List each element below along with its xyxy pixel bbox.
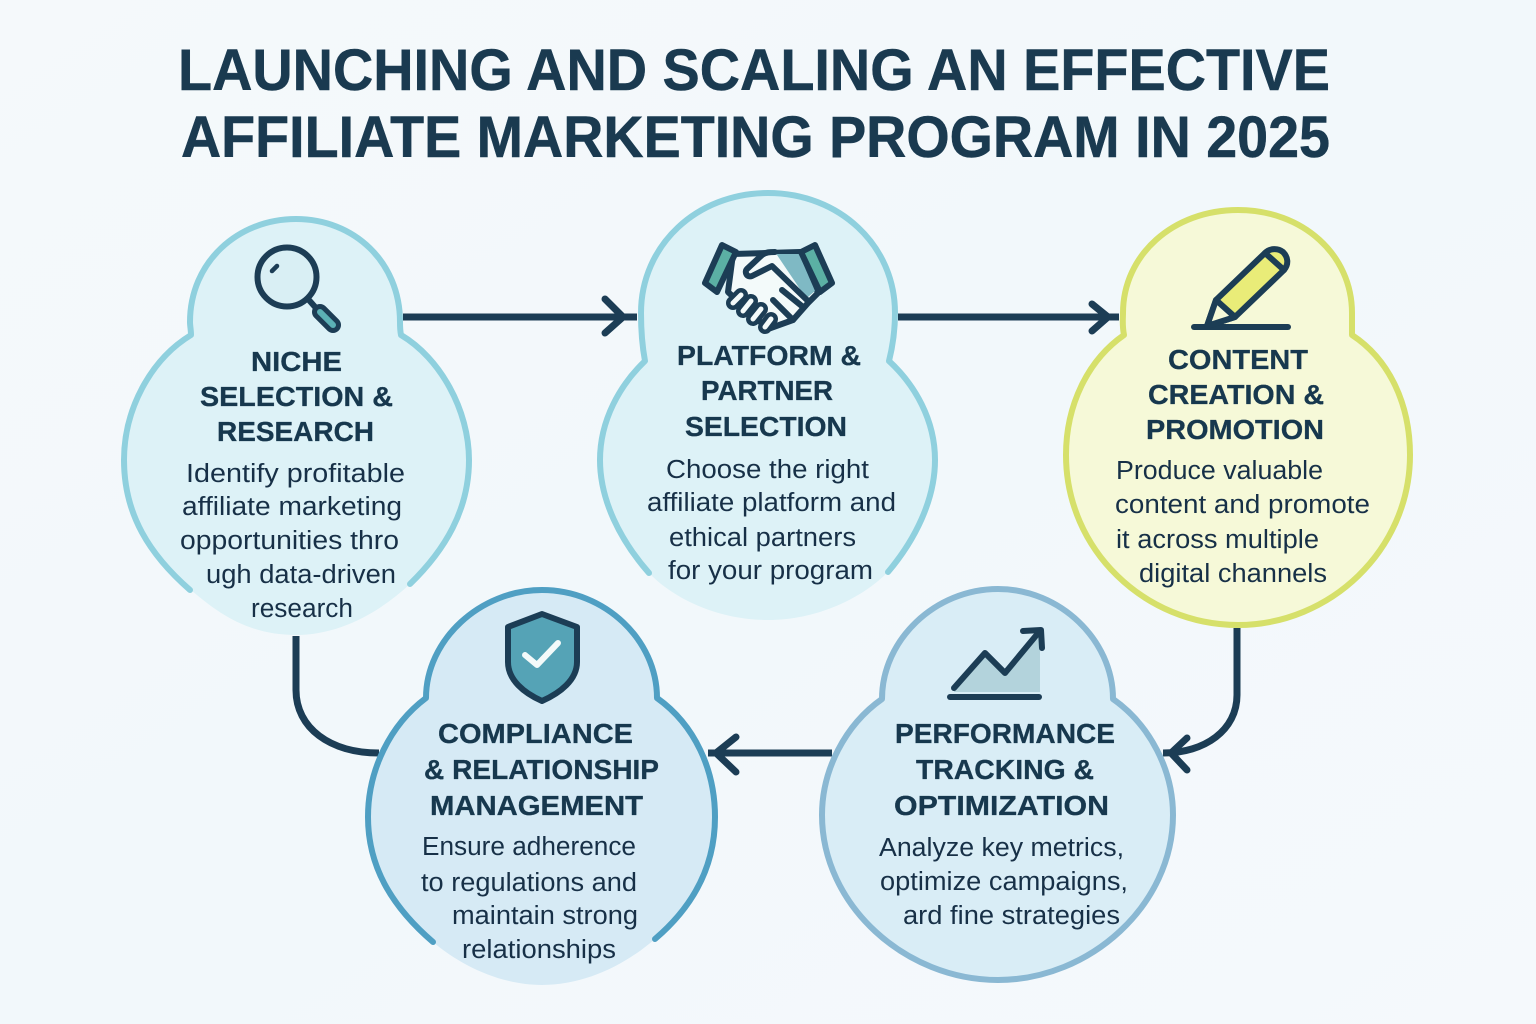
heading: content creation and promotion: CONTENT (1168, 344, 1308, 375)
heading: content creation and promotion: PROMOTION (1146, 414, 1324, 445)
text: compliance description: relationships (462, 936, 616, 964)
text: compliance description: to regulations and (421, 869, 637, 897)
text: platform description: affiliate platform and (647, 489, 896, 517)
arrow: performance to compliance (708, 737, 832, 772)
text: performance description (879, 834, 1128, 930)
text: content description: Produce valuable (1116, 457, 1323, 485)
text: compliance description (421, 833, 638, 964)
heading: content creation and promotion: CREATION & (1148, 379, 1324, 410)
title (178, 38, 1330, 170)
heading: compliance and relationship management: COMPLIANCE (438, 718, 633, 749)
arrow: platform to content (898, 304, 1119, 331)
heading: platform and partner selection (677, 340, 861, 442)
text: platform description: ethical partners (669, 524, 856, 552)
icon: pencil (1194, 249, 1288, 327)
panel: performance tracking and optimization (822, 589, 1173, 980)
heading: performance tracking and optimization (894, 718, 1115, 821)
heading: performance tracking and optimization: PERFORMANCE (895, 718, 1115, 749)
text: performance description: optimize campaigns, (880, 868, 1128, 896)
heading: niche selection and research (200, 346, 393, 447)
icon: growth chart (950, 630, 1042, 697)
heading: platform and partner selection: PLATFORM & (677, 340, 861, 371)
heading: compliance and relationship management (424, 718, 659, 821)
heading: content creation and promotion (1146, 344, 1324, 445)
panel: niche selection and research (124, 219, 469, 635)
heading: platform and partner selection: SELECTION (685, 411, 847, 442)
text: content description: it across multiple (1116, 526, 1319, 554)
panel: content creation and promotion (1066, 210, 1410, 625)
heading: compliance and relationship management: MANAGEMENT (430, 790, 643, 821)
text: platform description: for your program (668, 557, 873, 585)
heading: performance tracking and optimization: OPTIMIZATION (894, 790, 1109, 821)
text: platform description: Choose the right (666, 456, 869, 484)
text: content description: digital channels (1139, 560, 1327, 588)
heading: performance tracking and optimization: TRACKING & (916, 754, 1094, 785)
icon: handshake (705, 245, 832, 329)
arrow: niche to platform (403, 299, 637, 333)
heading: niche selection and research: SELECTION & (200, 381, 393, 412)
text: performance description: Analyze key metrics, (879, 834, 1124, 862)
text: niche description: ugh data-driven (206, 561, 396, 589)
icon: shield with check (508, 614, 577, 701)
title: LAUNCHING AND SCALING AN EFFECTIVE (178, 38, 1330, 103)
text: niche description: Identify profitable (186, 460, 405, 488)
panel: platform and partner selection (600, 193, 935, 620)
text: performance description: ard fine strategies (903, 902, 1120, 930)
text: niche description: affiliate marketing (182, 493, 402, 521)
icon: magnifying glass (258, 248, 333, 325)
title: AFFILIATE MARKETING PROGRAM IN 2025 (181, 105, 1330, 170)
text: niche description (180, 460, 405, 623)
heading: platform and partner selection: PARTNER (701, 375, 833, 406)
panel: compliance and relationship management (368, 590, 715, 985)
heading: niche selection and research: RESEARCH (217, 416, 374, 447)
text: niche description: opportunities thro (180, 527, 399, 555)
text: compliance description: Ensure adherence (422, 833, 636, 861)
text: content description: content and promote (1115, 491, 1370, 519)
text: platform description (647, 456, 896, 585)
arrow: niche to compliance (296, 636, 379, 753)
heading: niche selection and research: NICHE (251, 346, 342, 377)
heading: compliance and relationship management: & RELATIONSHIP (424, 754, 659, 785)
arrow: content to performance (1163, 628, 1237, 770)
text: niche description: research (251, 595, 353, 623)
text: content description (1115, 457, 1370, 588)
text: compliance description: maintain strong (452, 902, 638, 930)
